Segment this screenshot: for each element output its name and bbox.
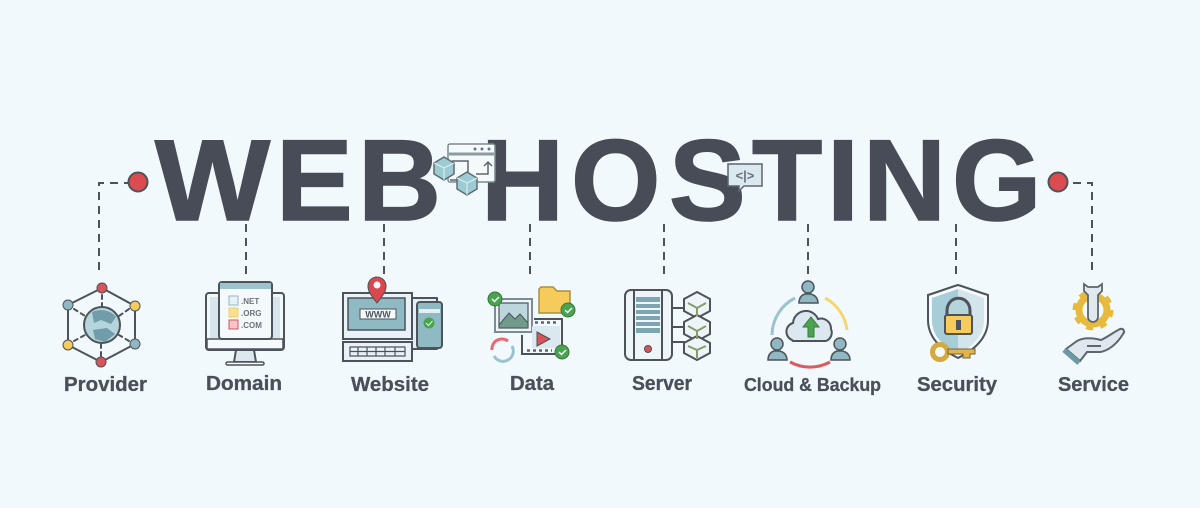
title: W (155, 117, 270, 245)
label: cloud and backup: Cloud & Backup (744, 374, 881, 395)
icon: service (1064, 284, 1124, 363)
label: domain: Domain (206, 373, 282, 395)
icon: domain: .NET (241, 297, 259, 306)
icon: domain: .ORG (241, 309, 261, 318)
icon: code bubble (728, 164, 762, 191)
title: HOSTING (481, 117, 1041, 245)
icon: cloud and backup (768, 281, 850, 367)
icon: data (488, 287, 575, 361)
icon: provider (63, 283, 140, 367)
icon: security (928, 285, 988, 360)
label: security: Security (917, 374, 998, 396)
label: data: Data (510, 373, 555, 395)
title: EB (276, 117, 441, 245)
icon: code bubble: <|> (736, 168, 755, 183)
connectors to title (246, 224, 956, 274)
icon: server (625, 290, 710, 360)
label: provider: Provider (64, 374, 147, 396)
label: website: Website (351, 374, 429, 396)
connector: left node (99, 172, 148, 270)
icon: website (343, 277, 442, 361)
icon: domain: .COM (241, 321, 262, 330)
label: server: Server (632, 373, 692, 395)
title (155, 117, 1041, 245)
icon: domain (206, 282, 284, 365)
label: service: Service (1058, 374, 1129, 396)
icon: data flow window (434, 144, 495, 195)
connector: right node (1048, 172, 1092, 270)
icon: website: WWW (365, 310, 391, 320)
